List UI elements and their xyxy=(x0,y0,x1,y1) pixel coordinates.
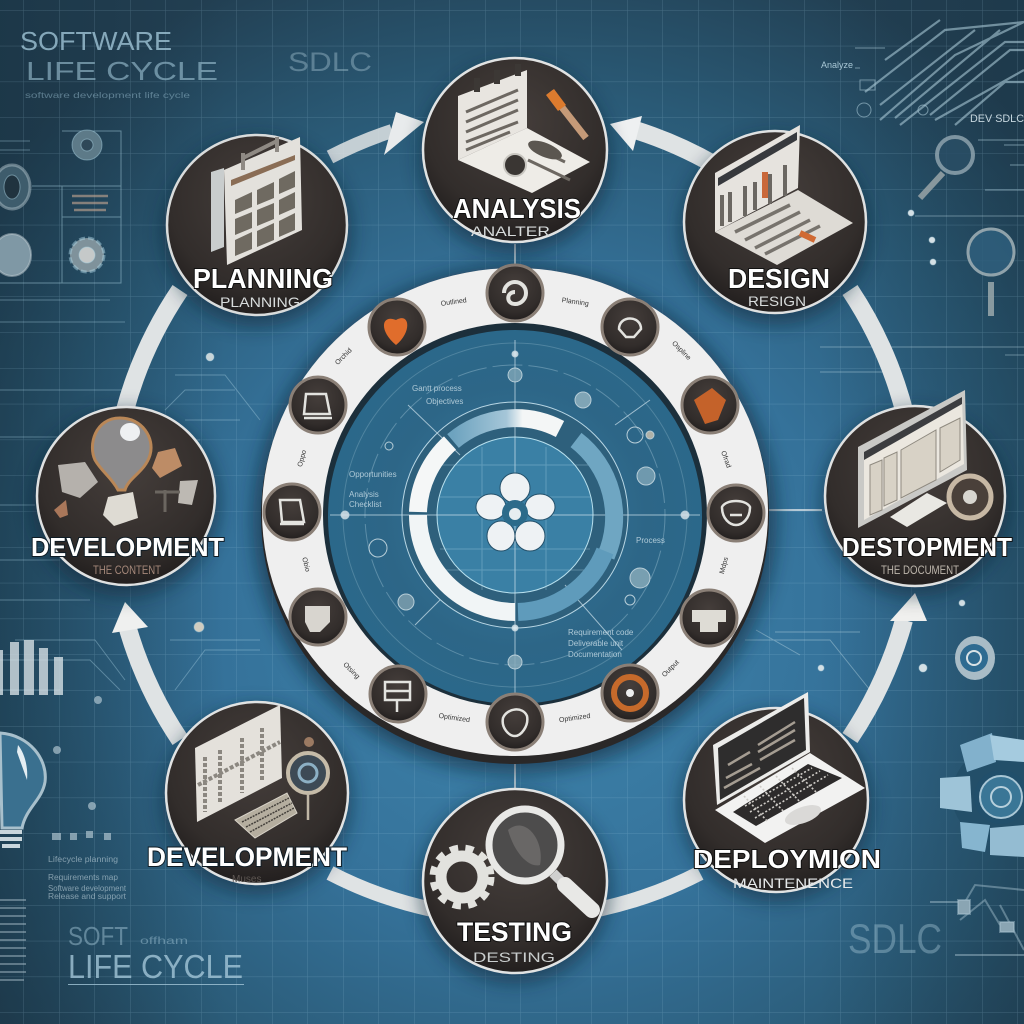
ring tiny labels: Outlined xyxy=(440,297,467,308)
background label: SDLC bottom right: SDLC xyxy=(848,915,942,962)
background label: lower left life cycle: LIFE CYCLE xyxy=(68,948,243,985)
label: deployment: DEPLOYMION xyxy=(693,844,881,874)
background notes: lower left: Release and support xyxy=(48,892,127,901)
background icon: magnifier one xyxy=(920,137,973,198)
ring buttons xyxy=(264,265,764,750)
inner disk details: Requirement code xyxy=(568,628,634,637)
background icon: small disc xyxy=(955,636,995,680)
inner disk details xyxy=(341,351,689,669)
sublabel: development left: THE CONTENT xyxy=(93,563,162,577)
icon: gear and magnifier xyxy=(434,809,592,910)
background title: software life cycle: LIFE CYCLE xyxy=(26,56,218,86)
central wheel xyxy=(253,265,777,774)
connectors xyxy=(262,244,822,795)
background title: software life cycle: SOFTWARE xyxy=(20,26,172,56)
node: design xyxy=(680,125,870,325)
node: destopment xyxy=(821,390,1012,597)
icon: laptop xyxy=(713,692,865,843)
icon: monitor xyxy=(858,390,991,528)
inner disk details: Analysis xyxy=(349,490,379,499)
node: deployment xyxy=(680,692,881,902)
ring tiny labels: Planning xyxy=(561,297,589,308)
node: development left xyxy=(31,407,224,597)
ring tiny labels: Oppo xyxy=(297,449,308,468)
sublabel: destopment: THE DOCUMENT xyxy=(881,563,960,577)
inner disk details: Checklist xyxy=(349,500,382,509)
sublabel: design: RESIGN xyxy=(748,293,806,309)
inner disk details: Deliverable unit xyxy=(568,639,624,648)
background title: software life cycle: software development life cycle xyxy=(25,91,191,100)
inner disk xyxy=(328,330,702,704)
ring tiny labels: Output xyxy=(661,659,681,679)
label: design: DESIGN xyxy=(728,263,830,294)
sublabel: testing: DESTING xyxy=(473,949,555,965)
background notes: lower left: Requirements map xyxy=(48,873,119,882)
center flower icon xyxy=(476,473,555,551)
cycle arrows xyxy=(112,112,927,909)
ring tiny labels xyxy=(297,297,732,724)
ring button glyphs xyxy=(280,282,750,736)
background panel: top right circuit xyxy=(821,20,1024,190)
node: development lower xyxy=(147,702,352,895)
node: testing xyxy=(419,789,611,984)
background icon: light bulb xyxy=(0,733,45,980)
ring tiny labels: Obio xyxy=(300,557,311,573)
inner disk details: Gantt process xyxy=(412,384,462,393)
inner disk details: Documentation xyxy=(568,650,622,659)
background lines: right middle xyxy=(745,210,1024,690)
ring tiny labels: Otsing xyxy=(341,661,361,681)
background icon: blue gear xyxy=(940,733,1024,857)
label: planning: PLANNING xyxy=(193,263,333,294)
ring tiny labels: Mdps xyxy=(719,556,730,575)
background panel: left diagram xyxy=(0,130,125,322)
label: analysis: ANALYSIS xyxy=(453,193,581,224)
background panel: top right circuit: Analyze xyxy=(821,60,853,70)
background label: SDLC top: SDLC xyxy=(288,47,372,77)
ring tiny labels: Optimized xyxy=(559,713,591,724)
ring tiny labels: Optimized xyxy=(438,713,470,724)
background label: lower left life cycle: offham xyxy=(140,936,188,947)
inner disk details: Process xyxy=(636,536,665,545)
icon: notebook xyxy=(458,64,590,193)
background bar chart xyxy=(0,640,63,695)
background label: lower left life cycle: SOFT xyxy=(68,921,128,951)
ring tiny labels: Ospline xyxy=(670,340,692,362)
node: analysis xyxy=(419,58,611,254)
sublabel: planning: PLANNING xyxy=(220,294,300,310)
background panel: top right circuit: DEV SDLC xyxy=(970,113,1024,125)
icon: open blueprint xyxy=(715,125,853,265)
label: destopment: DESTOPMENT xyxy=(842,532,1012,562)
background notes: lower left: Lifecycle planning xyxy=(48,855,118,864)
icon: wireframe and keyboard xyxy=(195,705,328,838)
background circuit lines: left middle xyxy=(0,353,260,690)
label: testing: TESTING xyxy=(457,917,572,947)
background notes: lower left: Software development xyxy=(48,884,127,893)
inner disk details: Opportunities xyxy=(349,470,397,479)
node: planning xyxy=(162,135,352,327)
ring tiny labels: Orchid xyxy=(334,347,354,367)
sublabel: maintenance: MAINTENENCE xyxy=(733,875,853,891)
icon: bulb and tools xyxy=(54,418,198,526)
label: development lower: DEVELOPMENT xyxy=(147,842,347,872)
icon: calendar xyxy=(211,137,302,265)
background icon: magnifier two xyxy=(968,229,1014,316)
sublabel: development lower: Muses xyxy=(232,874,261,885)
background title: software life cycle xyxy=(20,26,218,100)
background label: lower left life cycle xyxy=(68,921,244,985)
ring tiny labels: Ofrad xyxy=(719,450,732,469)
background notes: lower left xyxy=(48,696,127,901)
inner ring segments xyxy=(418,418,614,612)
sublabel: analysis: ANALTER xyxy=(471,223,550,239)
label: development left: DEVELOPMENT xyxy=(31,532,224,562)
inner disk details: Objectives xyxy=(426,397,463,406)
background scribble: lower right xyxy=(930,885,1024,955)
